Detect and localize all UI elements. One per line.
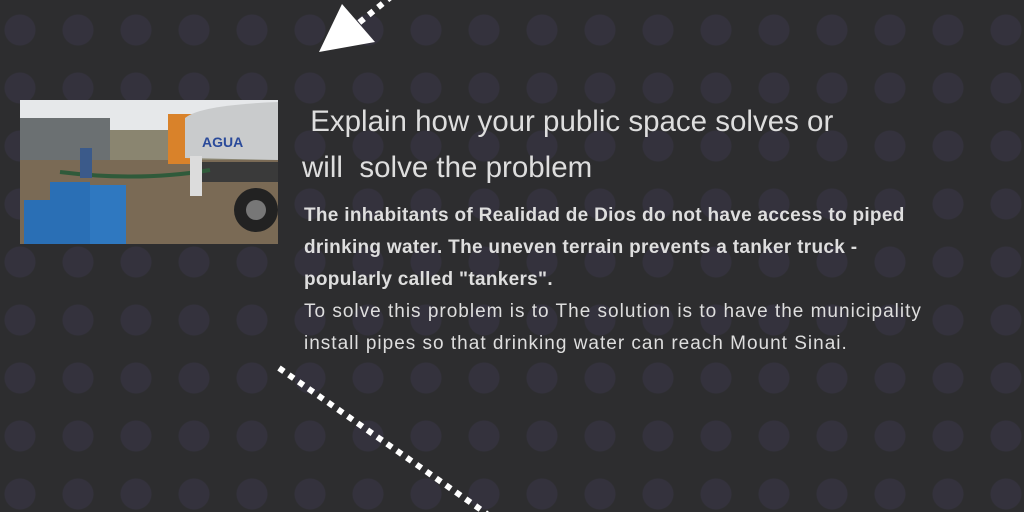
text block: description: To solve this problem is to The solution is to have the municipality xyxy=(304,301,922,322)
text block: description: drinking water. The uneven terrain prevents a tanker truck - xyxy=(304,237,857,258)
text block: description: The inhabitants of Realidad de Dios do not have access to piped xyxy=(304,205,905,226)
title: Explain how your public space solves or xyxy=(310,105,833,138)
text block: description xyxy=(304,205,922,354)
title: will solve the problem xyxy=(302,151,592,184)
text block: description: popularly called "tankers". xyxy=(304,269,553,290)
title xyxy=(302,105,833,184)
photo: water tanker truck: AGUA xyxy=(202,134,243,150)
photo: water tanker truck xyxy=(20,100,278,244)
text block: description: install pipes so that drinking water can reach Mount Sinai. xyxy=(304,333,848,354)
